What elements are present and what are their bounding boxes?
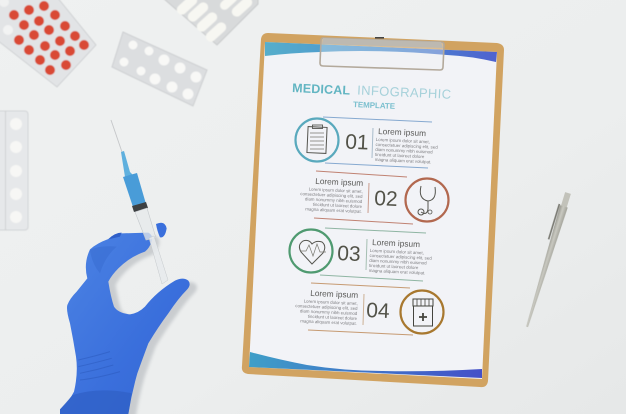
capsule blister pack bbox=[163, 0, 258, 45]
number 04: 04 bbox=[366, 299, 390, 323]
pen bbox=[522, 192, 572, 328]
text block 01: Lorem ipsum bbox=[378, 126, 426, 138]
clipboard board bbox=[242, 33, 504, 387]
title: TEMPLATE bbox=[353, 100, 396, 111]
text block 01: Lorem ipsum dolor sit amet, bbox=[376, 137, 430, 144]
text block 02: Lorem ipsum dolor sit amet, bbox=[309, 187, 363, 194]
text block 03: diam nonummy nibh euismod bbox=[369, 258, 427, 266]
text block 01 bbox=[375, 126, 439, 165]
row 03 bbox=[290, 228, 433, 281]
row 01 rules bbox=[323, 117, 432, 168]
row 02 rules bbox=[314, 171, 413, 224]
text block 04: Lorem ipsum bbox=[310, 288, 358, 300]
top colour band bbox=[265, 42, 497, 62]
title bbox=[292, 81, 451, 111]
text block 02 bbox=[300, 175, 364, 214]
row 03 rules bbox=[320, 228, 426, 281]
text block 04 bbox=[295, 287, 359, 326]
syringe bbox=[111, 120, 168, 284]
icon: brown circle with medicine bottle bbox=[400, 290, 444, 334]
icon: rust circle with stethoscope bbox=[406, 178, 448, 222]
text block 03: Lorem ipsum dolor sit amet, bbox=[370, 248, 424, 255]
text block 03: consectetuer adipiscing elit, sed bbox=[369, 253, 432, 261]
glove hand bbox=[60, 223, 197, 414]
metal clip bbox=[320, 37, 444, 70]
number 02: 02 bbox=[374, 187, 398, 211]
text block 03 bbox=[369, 237, 433, 276]
title: MEDICAL bbox=[292, 81, 351, 98]
text block 02: magna aliquam erat volutpat. bbox=[305, 206, 362, 214]
text block 04: diam nonummy nibh euismod bbox=[300, 308, 358, 316]
row 01 bbox=[296, 117, 439, 168]
white tablet blister pack bbox=[112, 32, 207, 106]
row 04 rules bbox=[308, 283, 413, 335]
row 04 bbox=[295, 283, 444, 335]
text block 04: consectetuer adipiscing elit, sed bbox=[295, 303, 358, 311]
text block 04: magna aliquam erat volutpat. bbox=[300, 318, 357, 326]
text block 02: diam nonummy nibh euismod bbox=[305, 196, 363, 204]
text block 01: tincidunt ut laoreet dolore bbox=[375, 152, 425, 159]
row 02 bbox=[300, 171, 448, 224]
text block 03: tincidunt ut laoreet dolore bbox=[369, 263, 419, 270]
title: INFOGRAPHIC bbox=[357, 83, 451, 102]
number 03: 03 bbox=[337, 242, 361, 266]
text block 02: consectetuer adipiscing elit, sed bbox=[300, 191, 363, 199]
text block 02: Lorem ipsum bbox=[315, 176, 363, 188]
paper sheet bbox=[249, 42, 497, 379]
number 01: 01 bbox=[345, 131, 369, 155]
bottom colour band bbox=[249, 352, 482, 378]
icon: teal circle with clipboard bbox=[296, 118, 338, 162]
text block 04: Lorem ipsum dolor sit amet, bbox=[304, 299, 358, 306]
text block 04: tincidunt ut laoreet dolore bbox=[308, 314, 358, 321]
text block 03: magna aliquam erat volutpat. bbox=[369, 268, 426, 275]
red pill blister pack bbox=[0, 0, 96, 87]
icon: green circle with heart bbox=[290, 230, 332, 272]
text block 01: magna aliquam erat volutpat. bbox=[375, 157, 432, 164]
left blister pack bbox=[0, 111, 28, 230]
text block 01: consectetuer adipiscing elit, sed bbox=[375, 142, 438, 150]
text block 01: diam nonummy nibh euismod bbox=[375, 147, 433, 155]
text block 03: Lorem ipsum bbox=[372, 237, 420, 249]
text block 02: tincidunt ut laoreet dolore bbox=[313, 202, 363, 209]
